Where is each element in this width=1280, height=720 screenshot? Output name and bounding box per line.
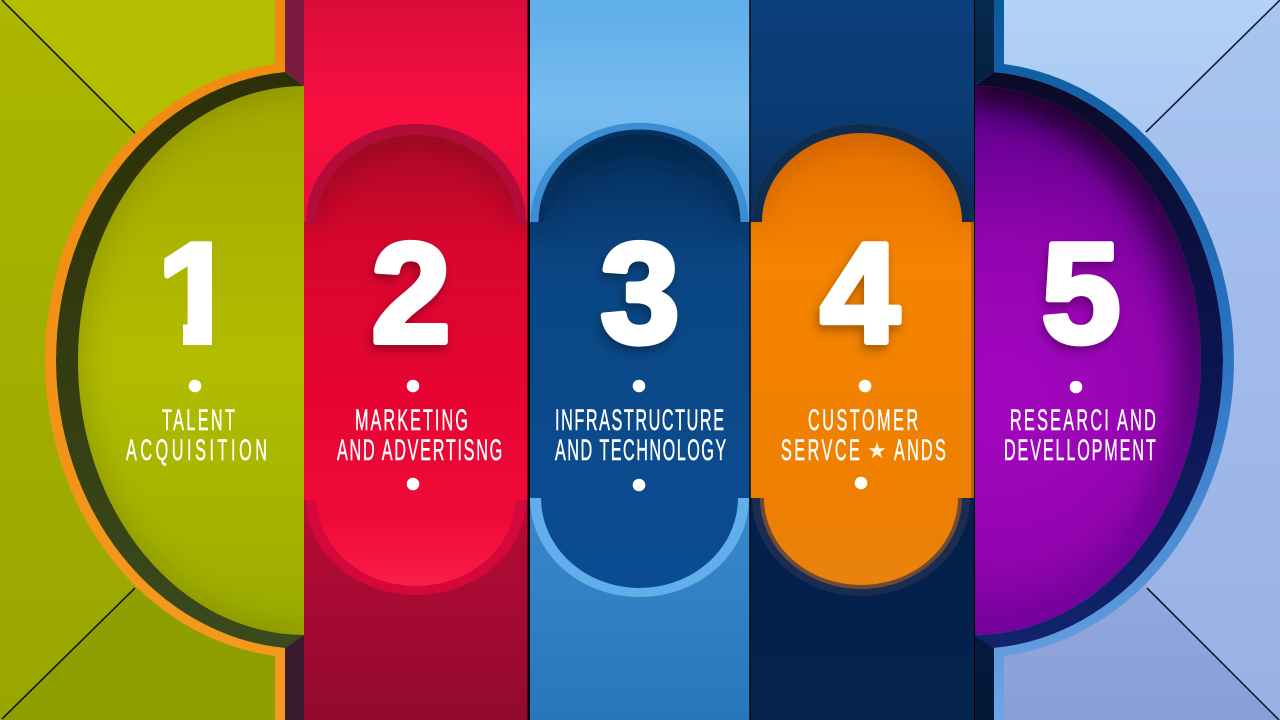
label: talent acquisition — [126, 404, 267, 467]
label: marketing and advertising: AND ADVERTISNG — [337, 434, 502, 467]
panel 3: infrastructure and technology — [530, 0, 750, 720]
panel 2: marketing and advertising — [304, 0, 528, 720]
label: talent acquisition: TALENT — [162, 404, 235, 437]
number 2: 2 — [372, 214, 450, 373]
label: customer service: SERVCE — [781, 434, 860, 467]
label: research and development: RESEARCI AND — [1010, 404, 1156, 437]
number 1: 1 — [158, 214, 236, 373]
label: talent acquisition: ACQUISITION — [126, 434, 267, 467]
number 3: 3 — [601, 214, 679, 373]
label: marketing and advertising — [337, 404, 502, 467]
number 4: 4 — [821, 214, 900, 373]
label: research and development: DEVELLOPMENT — [1004, 434, 1156, 467]
seams between columns — [528, 0, 751, 720]
label: customer service — [781, 404, 946, 467]
label: infrastructure and technology: AND TECHNOLOGY — [555, 434, 726, 467]
label: marketing and advertising: MARKETING — [355, 404, 468, 437]
label: customer service: CUSTOMER — [808, 404, 918, 437]
label: infrastructure and technology — [555, 404, 726, 467]
label: infrastructure and technology: INFRASTRUCTURE — [555, 404, 724, 437]
panel 4: customer service — [750, 0, 974, 720]
label: customer service: ★ — [867, 439, 887, 464]
number 5: 5 — [1042, 214, 1120, 373]
dots — [189, 380, 1082, 491]
label: research and development — [1004, 404, 1156, 467]
panel 1: talent acquisition — [0, 0, 304, 720]
label: customer service: ANDS — [894, 434, 946, 467]
panel 5: research and development — [965, 0, 1280, 720]
